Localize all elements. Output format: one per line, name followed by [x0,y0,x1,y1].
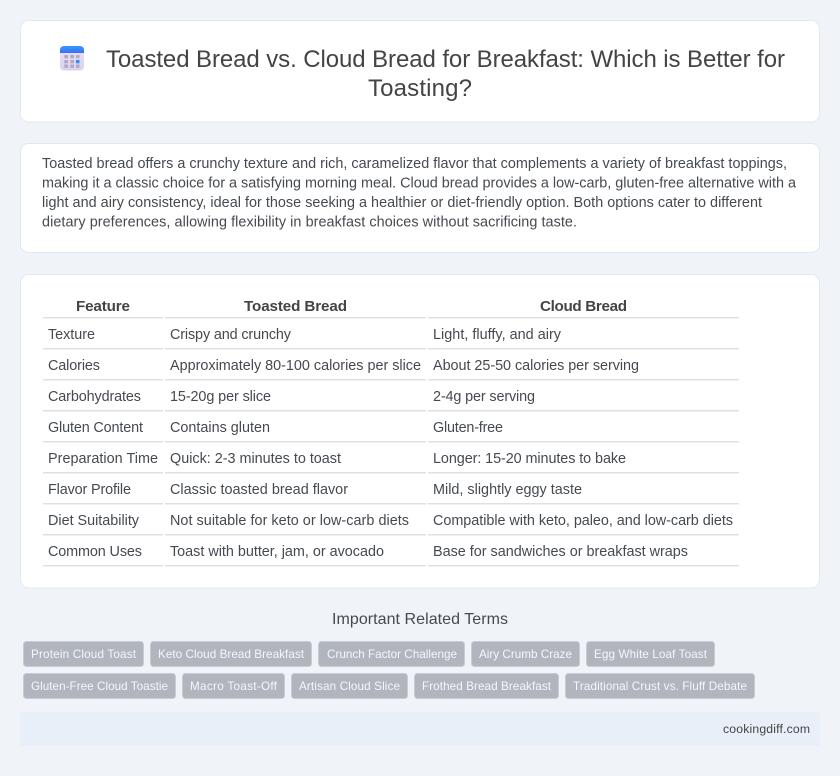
panel: title card [20,20,820,122]
footer source text: cookingdiff.com [723,722,810,736]
row: Texture [43,327,739,350]
tag: Traditional Crust vs. Fluff Debate [566,674,754,698]
tag: Macro Toast-Off [182,674,284,698]
tag: Protein Cloud Toast: Protein Cloud Toast [31,648,137,661]
row: Texture: Texture [48,327,95,343]
tag: Egg White Loaf Toast: Egg White Loaf Toast [594,648,708,661]
intro paragraph: dietary preferences, allowing flexibility in breakfast choices without sacrificing taste. [42,214,577,230]
row: Diet Suitability: Compatible with keto, paleo, and low-carb diets [433,513,733,529]
row: Diet Suitability: Diet Suitability [48,513,140,529]
tag: Artisan Cloud Slice [292,674,408,698]
row: Calories: Approximately 80-100 calories per slice [170,358,421,374]
tag: Gluten-Free Cloud Toastie [24,674,176,698]
table header: Toasted Bread [244,298,347,315]
tag: Airy Crumb Craze: Airy Crumb Craze [479,648,572,661]
row: Common Uses [43,544,739,566]
title: Toasted Bread vs. Cloud Bread for Breakfast: Which is Better for [106,46,785,73]
row: Flavor Profile [43,482,739,504]
tag: Airy Crumb Craze [472,642,580,666]
row: Carbohydrates: 15-20g per slice [170,389,271,405]
row: Calories [43,358,739,380]
tag: Frothed Bread Breakfast: Frothed Bread Breakfast [422,680,552,693]
row: Flavor Profile: Mild, slightly eggy taste [433,482,582,498]
tag: Macro Toast-Off: Macro Toast-Off [190,680,278,693]
row: Carbohydrates: 2-4g per serving [433,389,535,405]
row: Common Uses: Common Uses [48,544,142,560]
tag: Keto Cloud Bread Breakfast: Keto Cloud Bread Breakfast [158,648,305,661]
tag: Frothed Bread Breakfast [414,674,558,698]
panel: related term tags [24,642,754,698]
tag: Traditional Crust vs. Fluff Debate: Traditional Crust vs. Fluff Debate [573,680,747,693]
title: Toasting? [368,75,472,102]
row: Flavor Profile: Classic toasted bread flavor [170,482,348,498]
row: Calories: Calories [48,358,100,374]
row: Diet Suitability [43,513,739,536]
tag: Crunch Factor Challenge [318,642,464,666]
row: Texture: Crispy and crunchy [170,327,292,343]
panel: comparison table [20,274,820,588]
row: Preparation Time: Quick: 2-3 minutes to toast [170,451,341,467]
row: Gluten Content: Contains gluten [170,420,270,436]
panel: introduction text [20,144,820,252]
row: Common Uses: Base for sandwiches or breakfast wraps [433,544,688,560]
heading: Important Related Terms: Important Related Terms [332,611,508,628]
row: Preparation Time: Preparation Time [48,451,158,467]
row: Gluten Content: Gluten Content [48,420,143,436]
footer bar [20,712,820,746]
row: Texture: Light, fluffy, and airy [433,327,562,343]
row: Preparation Time: Longer: 15-20 minutes to bake [433,451,626,467]
table header: Cloud Bread [540,298,627,315]
row: Carbohydrates: Carbohydrates [48,389,141,405]
tag: Egg White Loaf Toast [586,642,714,666]
row: Common Uses: Toast with butter, jam, or avocado [170,544,384,560]
table header [43,298,739,318]
intro paragraph: light and airy consistency, ideal for those seeking a healthier or diet-friendly option. Both options cater to different [42,195,762,211]
row: Diet Suitability: Not suitable for keto or low-carb diets [170,513,409,529]
row: Gluten Content: Gluten-free [433,420,503,436]
icon: calendar [60,46,84,70]
table header: Feature [76,298,130,315]
intro paragraph [42,156,796,230]
tag: Crunch Factor Challenge: Crunch Factor Challenge [327,648,457,661]
tag: Gluten-Free Cloud Toastie: Gluten-Free Cloud Toastie [31,680,168,693]
row: Flavor Profile: Flavor Profile [48,482,131,498]
row: Preparation Time [43,451,739,474]
tag: Artisan Cloud Slice: Artisan Cloud Slice [299,680,400,693]
intro paragraph: Toasted bread offers a crunchy texture and rich, caramelized flavor that complements a variety of breakfast toppings, [42,156,787,172]
tag: Keto Cloud Bread Breakfast [150,642,312,666]
row: Gluten Content [43,420,739,442]
row: Calories: About 25-50 calories per serving [433,358,639,374]
title [106,46,785,102]
tag: Protein Cloud Toast [24,642,144,666]
intro paragraph: making it a classic choice for a satisfying morning meal. Cloud bread provides a low-carb, gluten-free alternative with a [42,176,796,192]
row: Carbohydrates [43,389,739,412]
